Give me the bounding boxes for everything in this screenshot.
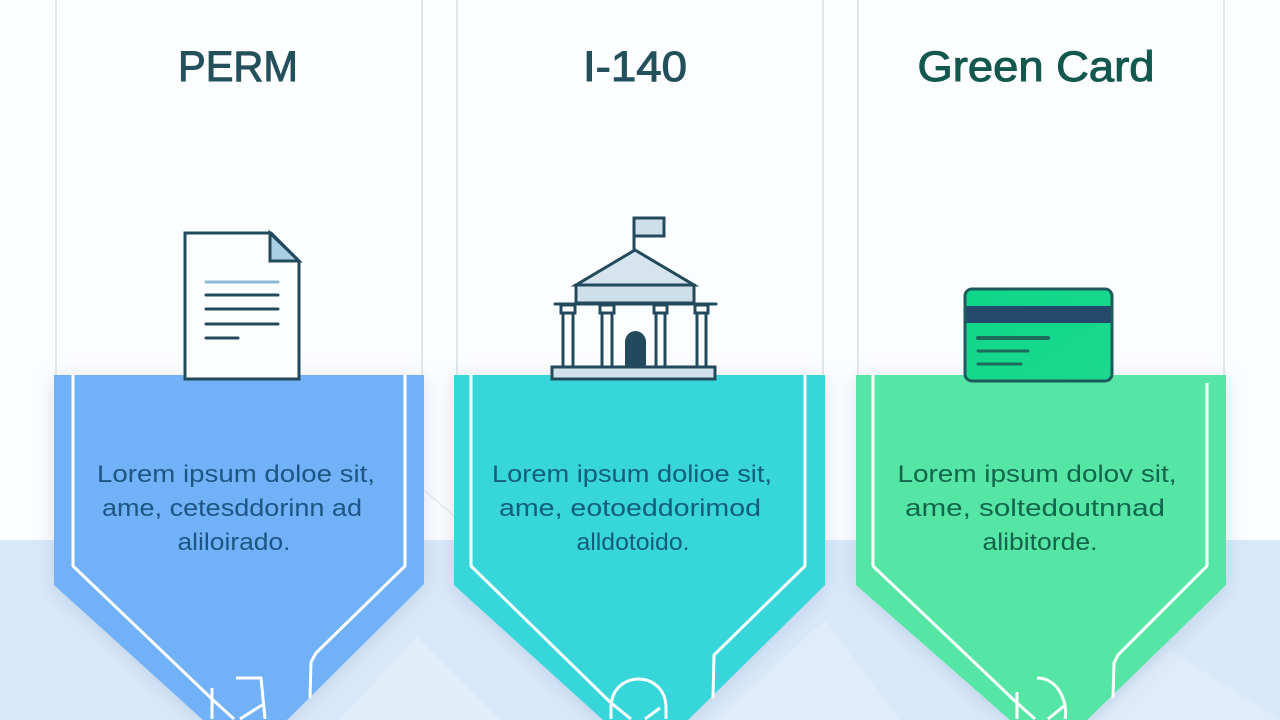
teal pentagon <box>454 375 825 720</box>
body text: alldotoido. <box>576 529 690 556</box>
body text: Lorem ipsum dolov sit, <box>898 461 1176 488</box>
column outlines <box>56 0 1224 376</box>
body text: Lorem ipsum doloe sit, <box>97 461 375 488</box>
body text: Lorem ipsum dolioe sit, <box>492 461 772 488</box>
green pentagon <box>856 375 1226 720</box>
body text: ame, eotoeddorimod <box>499 495 761 522</box>
body text: aliloirado. <box>178 529 290 556</box>
white inner outline <box>873 375 1207 719</box>
white inner outline <box>73 375 405 719</box>
white inner outline <box>471 375 805 719</box>
icon: green card <box>965 289 1112 381</box>
panel: I-140 <box>454 43 825 720</box>
heading: PERM: PERM <box>178 43 298 91</box>
body text: ame, soltedoutnnad <box>905 495 1165 522</box>
heading: Green Card: Green Card <box>918 43 1154 91</box>
body text: ame, cetesddorinn ad <box>102 495 362 522</box>
body text <box>492 461 772 556</box>
blue pentagon <box>54 375 424 720</box>
panel: Green Card <box>856 43 1226 720</box>
heading: I-140: I-140 <box>583 43 687 91</box>
body text <box>97 461 375 556</box>
body text <box>898 461 1176 556</box>
panel: PERM <box>54 43 424 720</box>
icon: government building <box>552 218 716 379</box>
icon: document <box>185 233 299 379</box>
body text: alibitorde. <box>982 529 1098 556</box>
